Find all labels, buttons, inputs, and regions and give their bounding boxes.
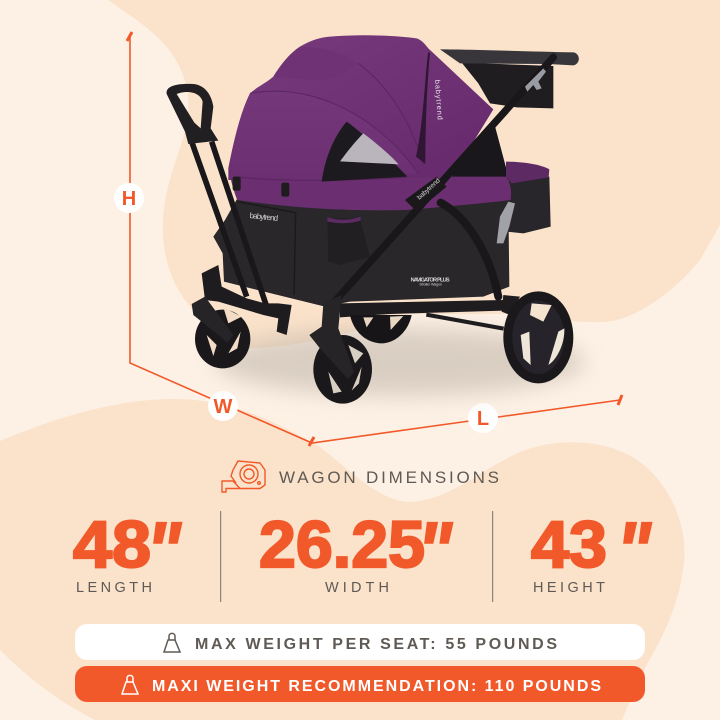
rear opening	[443, 120, 509, 180]
stat: length	[73, 506, 182, 597]
purple lower band	[228, 168, 511, 210]
mesh window	[322, 122, 407, 182]
side grey clip	[497, 202, 515, 243]
bar: max weight per seat: MAX WEIGHT PER SEAT: 55 POUNDS	[195, 636, 557, 653]
rear tray and storage bag	[440, 49, 579, 108]
canopy visor flap	[273, 47, 358, 81]
canopy brand text: babytrend	[433, 80, 445, 120]
canopy base	[228, 35, 493, 180]
dimension lines	[127, 32, 622, 446]
icon: tape measure	[222, 461, 265, 492]
stat: height: 43	[531, 507, 607, 581]
stat: width	[259, 506, 453, 597]
stat: length: 48	[73, 507, 151, 581]
side pocket	[327, 217, 370, 265]
stat: height: "	[616, 506, 652, 597]
wheel: front right	[309, 295, 372, 404]
canopy centre fold	[416, 52, 430, 164]
divider	[492, 511, 493, 602]
wagon body	[213, 198, 509, 307]
navigator plus label	[411, 278, 450, 287]
frame brand text: babytrend	[416, 177, 442, 201]
body seam and logo panel	[237, 202, 296, 295]
length marker: L	[477, 408, 489, 430]
section heading	[222, 461, 499, 492]
heading text: WAGON DIMENSIONS	[279, 468, 499, 487]
stat: length: "	[146, 506, 182, 597]
icon: weight	[122, 675, 138, 694]
main diagonal frame tube	[330, 57, 553, 307]
frame sleeve	[405, 177, 447, 212]
wheel: rear near	[503, 291, 573, 383]
wagon illustration	[167, 35, 579, 404]
width marker: W	[214, 396, 233, 418]
wheel: rear far	[350, 315, 412, 343]
floor shadow	[215, 328, 585, 396]
bar: maxi weight recommendation: MAXI WEIGHT RECOMMENDATION: 110 POUNDS	[152, 678, 601, 695]
stat: width: "	[417, 506, 453, 597]
navigator plus label: Stroller Wagon	[419, 283, 442, 287]
stat: width: WIDTH	[325, 580, 389, 596]
wagon brand label: babytrend	[249, 211, 279, 223]
rear side basket	[506, 162, 551, 233]
icon: weight	[164, 633, 180, 652]
height marker: H	[122, 188, 136, 210]
length marker	[468, 403, 498, 433]
canopy clips	[233, 177, 289, 197]
stat: height	[531, 506, 652, 597]
frame grey latch	[525, 68, 546, 92]
bar: max weight per seat	[75, 624, 645, 660]
stat: length: LENGTH	[76, 580, 152, 596]
canopy front panel	[228, 91, 418, 179]
wheel: front left	[192, 297, 250, 368]
canopy seams	[235, 63, 423, 180]
divider	[220, 511, 221, 602]
bar: maxi weight recommendation	[75, 666, 645, 702]
background: upper peach blob	[108, 0, 720, 348]
width marker	[208, 391, 238, 421]
height marker	[114, 183, 144, 213]
front axle and frame	[202, 265, 520, 335]
background: lower peach blob	[0, 399, 685, 720]
navigator plus label: NAVIGATOR PLUS	[411, 278, 450, 284]
stat: width: 26.25	[259, 507, 425, 581]
stat: height: HEIGHT	[533, 580, 605, 596]
pull handle	[167, 84, 267, 307]
